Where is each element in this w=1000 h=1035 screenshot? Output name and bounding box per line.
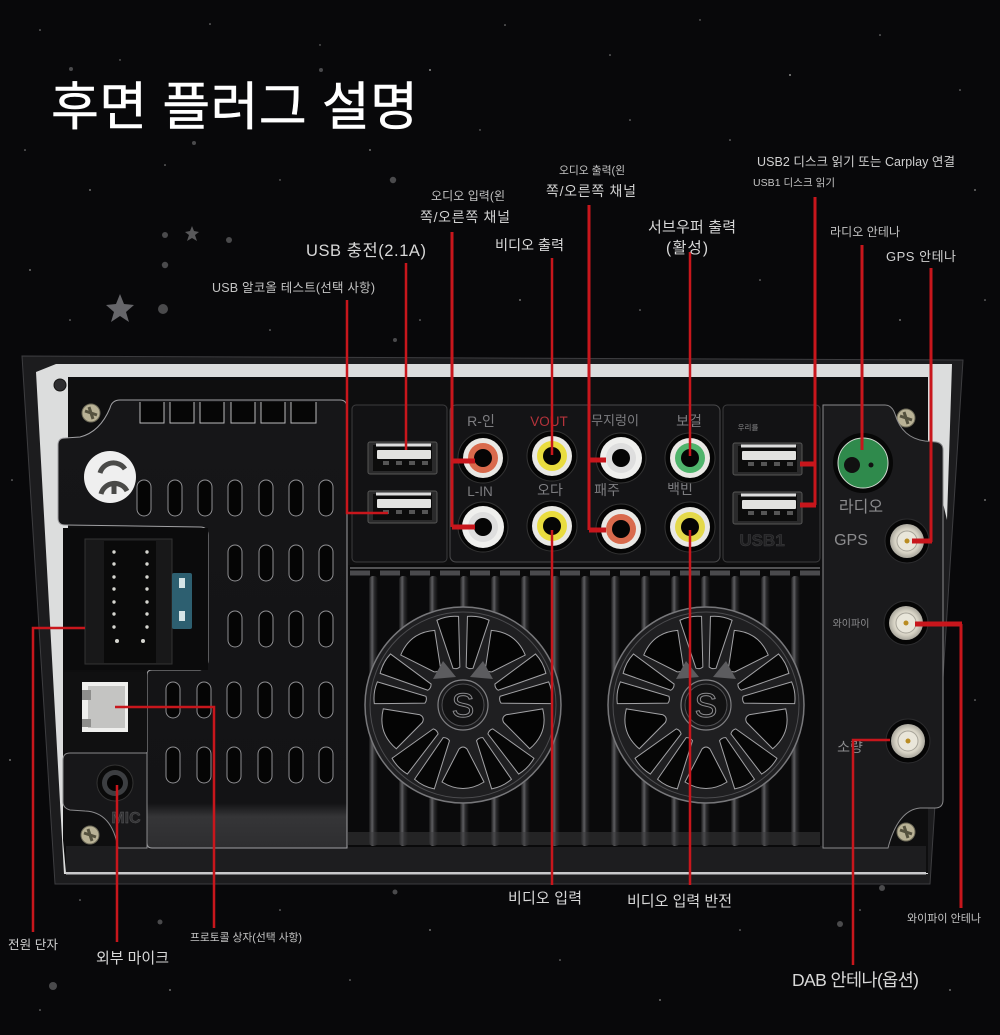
label: protocol box: 프로토콜 상자(선택 사항) — [190, 931, 302, 944]
panel: left USB ports — [352, 405, 447, 562]
jack: yellow top — [527, 431, 577, 481]
protocol box connector — [64, 672, 147, 752]
leader line: protocol box — [115, 707, 214, 928]
leader line: subwoofer — [689, 252, 691, 456]
label: video output: 비디오 출력 — [495, 238, 564, 254]
power connector block — [63, 528, 208, 670]
label: audio input line 2: 쪽/오른쪽 채널 — [420, 209, 510, 225]
label: WiFi: 와이파이 — [833, 618, 869, 630]
label: small: 소량 — [837, 739, 863, 755]
fan wheel right — [608, 607, 804, 803]
leader line: WiFi antenna — [960, 624, 962, 908]
panel: right USB ports: 우리를 — [738, 423, 758, 432]
panel: heatsink fins and fans — [348, 565, 820, 847]
title: 후면 플러그 설명 — [51, 79, 418, 137]
label: radio: 라디오 — [839, 498, 883, 516]
antenna socket: GPS — [885, 519, 929, 563]
panel: RCA jacks: 무지렁이 — [591, 413, 639, 428]
fan wheel left: S — [452, 687, 474, 725]
leader line: USB alcohol test — [347, 300, 388, 513]
label: subwoofer line 1: 서브우퍼 출력 — [648, 219, 736, 236]
leader branch: GPS antenna — [912, 538, 932, 544]
bottom silver line — [66, 872, 926, 874]
leader branches: audio out — [589, 460, 606, 530]
device: head unit rear panel — [22, 356, 963, 884]
leader line: USB charging — [405, 263, 407, 450]
jack: yellow bottom right — [665, 502, 715, 552]
panel: RCA jacks: 보걸 — [676, 413, 702, 429]
panel: right USB ports — [723, 405, 820, 562]
label: radio antenna: 라디오 안테나 — [830, 225, 900, 239]
silver bracket — [36, 364, 952, 874]
leader line: radio antenna — [860, 245, 864, 450]
leader line: video out — [551, 258, 553, 455]
jack: red top — [458, 433, 508, 483]
label: audio input line 1: 오디오 입력(왼 — [431, 189, 505, 203]
panel: RCA jacks: VOUT — [530, 414, 568, 429]
screws — [54, 379, 915, 844]
bottom textured band — [66, 846, 926, 872]
fan wheel right: S — [695, 687, 717, 725]
outer frame — [22, 356, 963, 884]
microphone block — [63, 753, 147, 848]
fuse — [172, 573, 192, 629]
jack: red bottom — [596, 504, 646, 554]
label: WiFi antenna: 와이파이 안테나 — [907, 912, 981, 925]
antenna socket: WiFi — [884, 601, 928, 645]
leader line: reverse video input — [689, 530, 691, 885]
label: USB alcohol test: USB 알코올 테스트(선택 사항) — [212, 281, 375, 295]
logo badge — [84, 451, 136, 503]
panel: RCA jacks: L-IN — [467, 484, 493, 499]
leader line: video input — [551, 530, 553, 885]
label: video input: 비디오 입력 — [508, 890, 582, 907]
leader branch: WiFi antenna — [915, 622, 962, 626]
panel: RCA jacks — [450, 405, 720, 562]
leader line: audio input — [450, 232, 454, 527]
leader line: audio out — [588, 205, 590, 530]
left cover plate — [58, 400, 347, 848]
leader branches: USB 1 and 2 — [800, 464, 816, 505]
label: GPS: GPS — [834, 532, 868, 549]
ventilation slots — [137, 480, 333, 783]
label: USB2: USB2 디스크 읽기 또는 Carplay 연결 — [757, 155, 955, 169]
inner black chassis — [63, 377, 928, 873]
label: power terminal: 전원 단자 — [8, 938, 58, 952]
jack: white bottom — [458, 502, 508, 552]
antenna socket: DAB — [886, 719, 930, 763]
MIC label: MIC — [111, 810, 141, 827]
leader line: GPS antenna — [930, 268, 932, 542]
RCA labels: R-인 — [467, 413, 495, 429]
label: audio output line 2: 쪽/오른쪽 채널 — [546, 183, 636, 199]
icon: small grey star — [185, 226, 199, 241]
leader line: DAB antenna — [853, 740, 890, 965]
leader line: external microphone — [116, 785, 118, 942]
label: DAB antenna: DAB 안테나(옵션) — [792, 970, 919, 990]
leader line: USB 1 and 2 — [814, 197, 816, 505]
jack: green top — [665, 433, 715, 483]
label: audio output line 1: 오디오 출력(왼 — [559, 163, 625, 177]
jack: white top — [596, 433, 646, 483]
fan wheel left — [365, 607, 561, 803]
jack: yellow bottom — [527, 501, 577, 551]
label: reverse video input: 비디오 입력 반전 — [627, 893, 732, 910]
panel: RCA jacks: 백빈 — [667, 481, 693, 497]
label: USB charging: USB 충전(2.1A) — [306, 241, 426, 260]
panel: antenna plate — [823, 405, 943, 848]
label: USB1: USB1 디스크 읽기 — [753, 176, 835, 189]
panel: RCA jacks: 패주 — [594, 482, 620, 498]
leader line: power terminal — [33, 628, 85, 932]
vent comb on left plate — [140, 402, 316, 423]
label: external microphone: 외부 마이크 — [96, 950, 169, 967]
label: subwoofer line 2: (활성) — [666, 239, 708, 257]
panel: RCA jacks: 오다 — [537, 482, 563, 498]
radio connector — [833, 433, 893, 493]
icon: large grey star — [106, 294, 134, 322]
panel: right USB ports: USB1 — [739, 531, 785, 550]
leader branches: audio input — [452, 461, 475, 527]
label: GPS antenna: GPS 안테나 — [886, 249, 956, 264]
